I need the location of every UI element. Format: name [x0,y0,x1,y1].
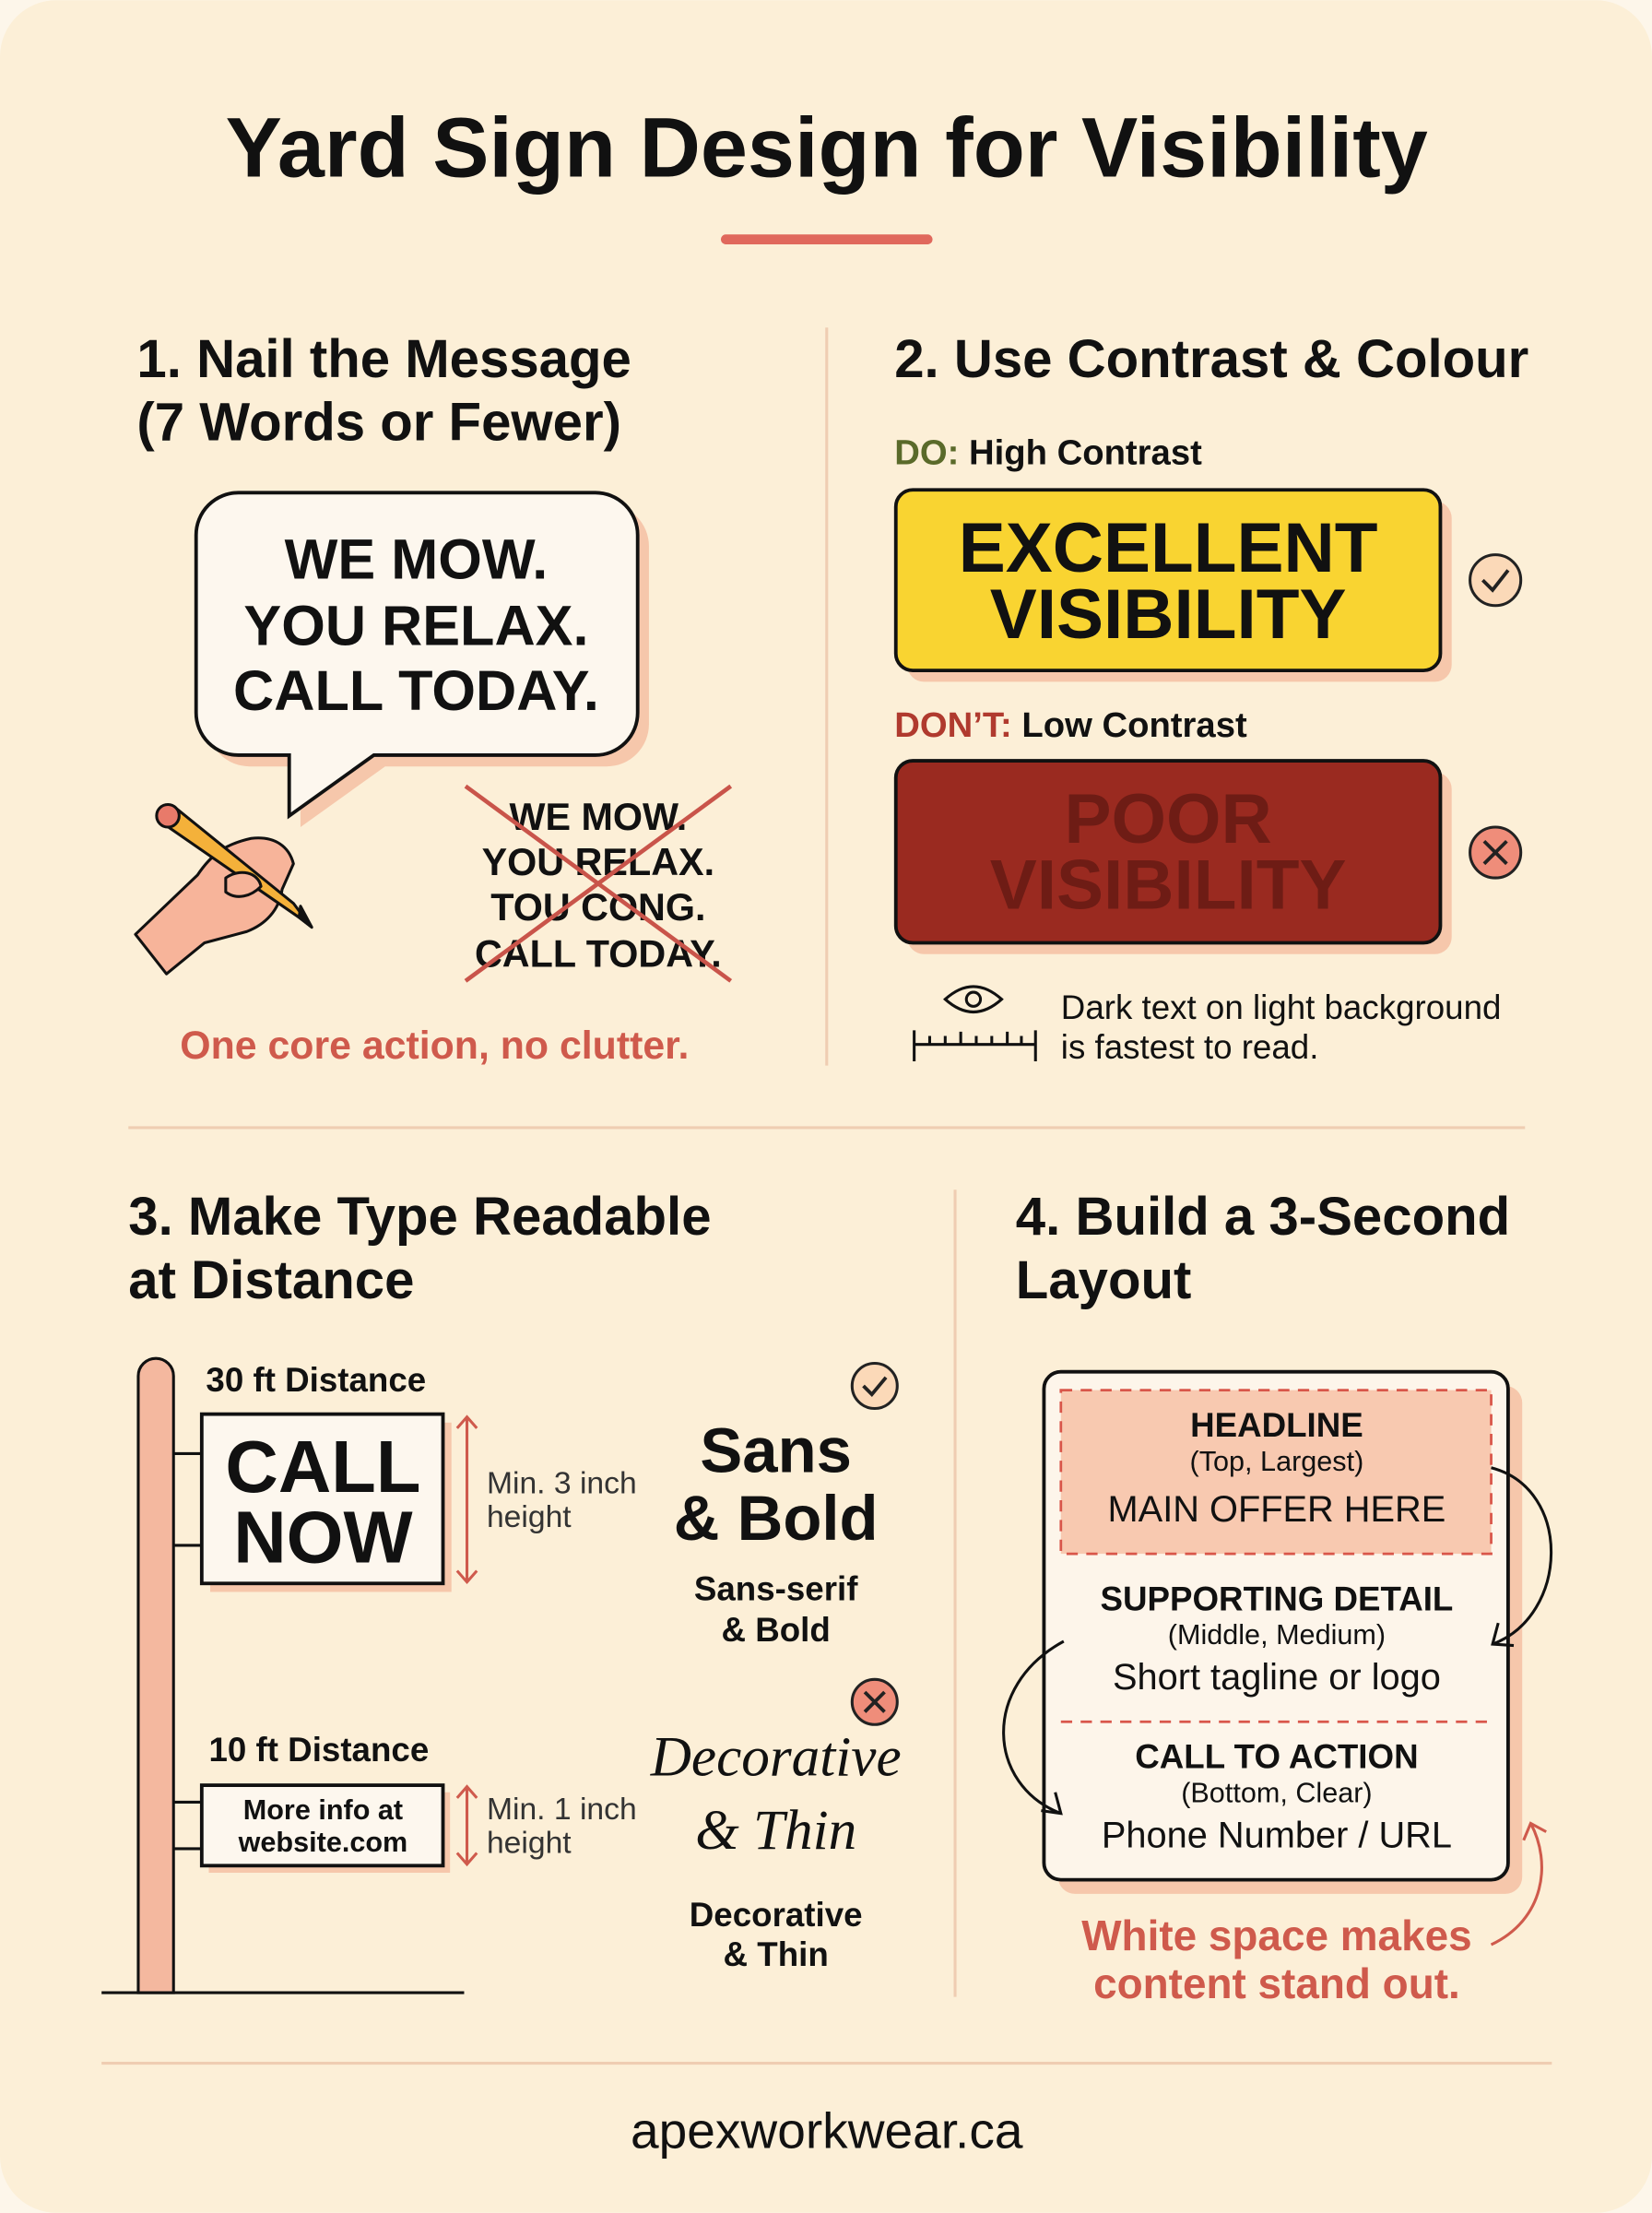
layout sign [1044,1372,1522,1894]
icon: hand with pencil [136,805,312,974]
arrow: 3 inch [457,1417,477,1582]
icon: x decorative [852,1679,897,1724]
good sign example [896,490,1452,681]
panel: type at distance: Decorative [690,1896,863,1934]
decorative example: & Thin [695,1799,856,1862]
panel: type at distance [101,1187,902,1993]
arrow: detail to cta [1004,1641,1064,1814]
bad sign example [896,761,1452,954]
panel: type at distance: & Thin [724,1935,829,1973]
panel: type at distance: & Bold [722,1611,831,1649]
icon: check [1470,555,1521,606]
speech bubble: CALL TODAY. [233,659,599,722]
10 ft label: 10 ft Distance [208,1731,429,1769]
layout sign: Phone Number / URL [1102,1815,1452,1855]
icon: x [1470,827,1521,878]
30 ft label: 30 ft Distance [206,1361,426,1399]
footer: apexworkwear.ca [631,2101,1023,2159]
big sign: NOW [233,1496,414,1578]
heading 1: (7 Words or Fewer) [136,393,621,453]
do label: DO: High Contrast [894,433,1202,473]
title: Yard Sign Design for Visibility [226,101,1428,195]
good sign example: VISIBILITY [990,575,1347,654]
panel: type at distance: Min. 3 inch [487,1466,637,1500]
layout sign: HEADLINE [1190,1406,1363,1444]
good sign example: EXCELLENT [959,509,1377,587]
panel: 3-second layout [1004,1187,1552,2007]
layout sign: (Top, Largest) [1190,1446,1363,1477]
heading 2: 2. Use Contrast & Colour [894,329,1528,389]
caption 4: White space makes [1081,1911,1472,1959]
crossed out cluttered message: YOU RELAX. [482,841,714,883]
icon: check sans [852,1364,897,1408]
dont label: DON’T: Low Contrast [894,705,1247,745]
panel: type at distance: Min. 1 inch [487,1793,637,1827]
decorative example: Decorative [651,1725,902,1788]
layout sign: CALL TO ACTION [1135,1738,1419,1776]
speech bubble: WE MOW. [285,528,548,591]
panel: contrast and colour [894,329,1528,1066]
crossed out cluttered message: WE MOW. [510,796,687,838]
bad sign example: POOR [1064,780,1272,858]
arrow: white space [1492,1823,1546,1945]
panel: type at distance: Sans-serif [694,1570,857,1608]
sans example: & Bold [674,1483,879,1554]
tip text: is fastest to read. [1061,1028,1318,1066]
title [226,101,1428,244]
panel: type at distance: height [487,1500,572,1534]
small sign: More info at [243,1794,403,1826]
big sign [202,1414,452,1592]
heading 4: 4. Build a 3-Second [1016,1187,1510,1247]
arrow: 1 inch [457,1787,477,1864]
heading 3: at Distance [128,1250,414,1310]
sans example: Sans [700,1414,852,1485]
panel: nail the message [136,329,731,1068]
heading 4: Layout [1016,1250,1191,1310]
speech bubble: YOU RELAX. [243,595,588,657]
small sign: website.com [238,1827,407,1858]
layout sign: (Middle, Medium) [1168,1619,1386,1651]
heading 3: 3. Make Type Readable [128,1187,712,1247]
caption 1: One core action, no clutter. [180,1024,689,1068]
tip text: Dark text on light background [1061,988,1501,1026]
big sign: CALL [225,1426,421,1508]
layout sign: Short tagline or logo [1113,1657,1441,1698]
layout sign: SUPPORTING DETAIL [1101,1580,1453,1617]
arrow: headline to detail [1492,1468,1552,1646]
crossed out cluttered message [466,787,731,981]
crossed out cluttered message: TOU CONG. [490,886,705,929]
caption 4: content stand out. [1093,1959,1460,2007]
icon: eye and ruler [914,987,1035,1061]
small sign [202,1785,450,1873]
sign post [101,1358,464,1993]
speech bubble [196,492,649,827]
crossed out cluttered message: CALL TODAY. [475,932,722,975]
bad sign example: VISIBILITY [990,846,1347,925]
panel: type at distance: height [487,1827,572,1861]
heading 1: 1. Nail the Message [136,329,631,389]
layout sign: (Bottom, Clear) [1181,1777,1373,1808]
layout sign: MAIN OFFER HERE [1108,1489,1446,1530]
